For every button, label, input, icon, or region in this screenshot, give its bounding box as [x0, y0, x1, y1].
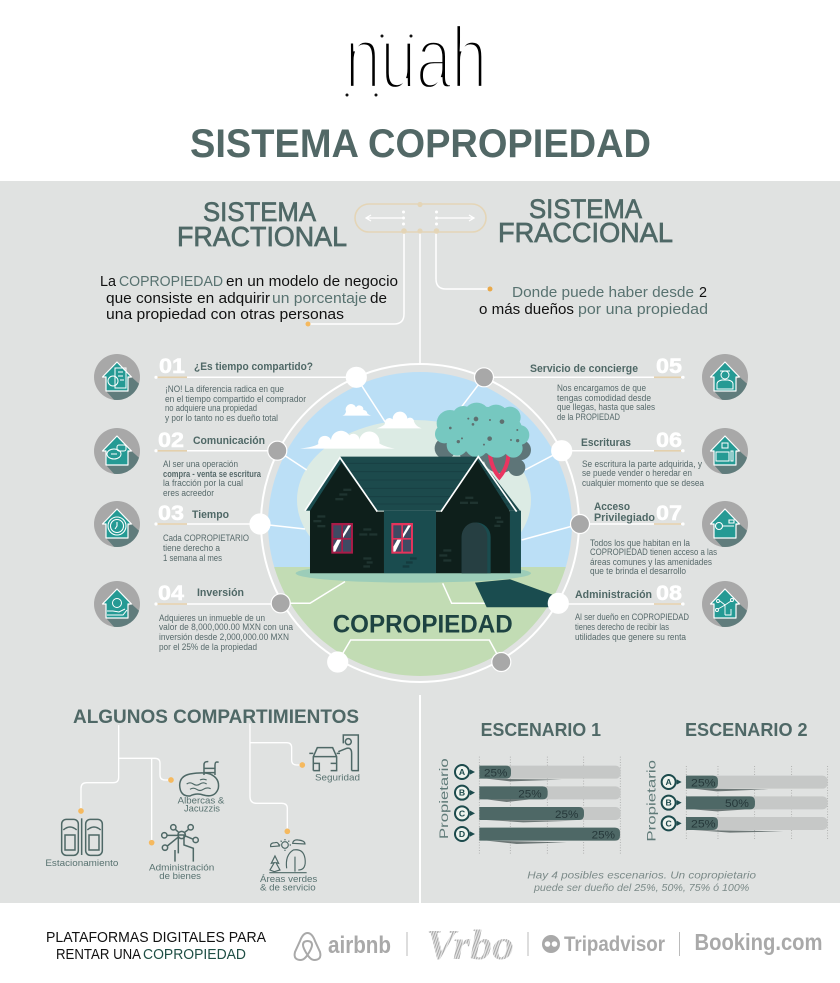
chart: scenario 2: A [666, 777, 673, 787]
item 02: compra - venta se escritura [163, 469, 262, 479]
footer: digital platforms heading: COPROPIEDAD [143, 947, 246, 963]
icon: 05 concierge house [702, 354, 755, 407]
note: possible scenarios: puede ser dueño del 25%, 50%, 75% ó 100% [533, 883, 749, 894]
text: definition of coproperty: en un modelo de negocio [226, 274, 398, 290]
chart: scenario 2: 25% [691, 819, 716, 831]
item 02: Comunicación [193, 435, 265, 447]
item 02: Al ser una operación [163, 459, 238, 469]
heading: escenario 1: ESCENARIO 1 [481, 719, 601, 740]
house illustration circle [260, 370, 580, 687]
text: definition of coproperty: de [370, 291, 387, 307]
item 03 [158, 502, 249, 563]
item 07: Acceso [594, 501, 630, 513]
text: definition of coproperty: un porcentaje [272, 291, 367, 307]
text: definition of coproperty: una propiedad con otras personas [106, 307, 344, 323]
tree [435, 403, 531, 477]
icon: 07 key and amenities house [702, 501, 755, 554]
icon: 03 clock house [94, 501, 147, 554]
note: possible scenarios: Hay 4 posibles escenarios. Un copropietario [527, 870, 756, 881]
item 06: se puede vender o heredar en [582, 468, 692, 478]
heading: sistema fraccional: FRACCIONAL [498, 217, 673, 248]
icon: security gate [309, 735, 358, 771]
item 06: Escrituras [581, 437, 631, 449]
item 06: 06 [656, 429, 682, 452]
panel: shared amenities: Administración [149, 863, 214, 873]
item 08: 08 [656, 582, 682, 605]
item 08: utilidades que genere su renta [575, 632, 686, 642]
item 05 [530, 355, 682, 422]
heading: sistema fractional: SISTEMA [203, 197, 316, 227]
icon: 08 network house [702, 581, 755, 634]
item 04: 04 [158, 582, 184, 605]
heading: sistema fractional: FRACTIONAL [177, 221, 347, 252]
icon: 01 calendar and clock house [94, 354, 147, 407]
text: definition of coproperty: que consiste en adquirir [106, 291, 270, 307]
item 04: inversión desde 2,000,000.00 MXN [159, 632, 289, 642]
icon: 04 money in hand house [94, 581, 147, 634]
item 07: COPROPIEDAD tienen acceso a las [590, 547, 717, 557]
panel: shared amenities: Seguridad [315, 773, 360, 783]
item 05: de la PROPIEDAD [557, 412, 620, 422]
item 01 [159, 355, 313, 423]
heading: algunos compartimientos: ALGUNOS COMPARTIMIENTOS [73, 707, 359, 728]
item 02: eres acreedor [163, 488, 214, 498]
icon: 06 deed and window house [702, 428, 755, 481]
item 07: Privilegiado [594, 512, 655, 524]
panel: shared amenities: de bienes [159, 871, 201, 881]
internal connectors [260, 377, 580, 662]
text: number of owners: por una propiedad [578, 302, 708, 318]
item 01: y por lo tanto no es dueño total [165, 413, 278, 423]
item 05: Nos encargamos de que [557, 383, 646, 393]
chart: scenario 1: 25% [592, 830, 615, 842]
item 03: 03 [158, 502, 184, 525]
item 01: ¿Es tiempo compartido? [194, 361, 313, 373]
footer: digital platforms heading [46, 930, 266, 963]
chart: scenario 1: B [459, 788, 465, 798]
chart: scenario 1 [437, 757, 621, 855]
icon: 02 chat bubbles house [94, 428, 147, 481]
logo: airbnb [295, 932, 391, 960]
logo: vrbo: Vrbo [426, 923, 514, 969]
text: definition of coproperty: COPROPIEDAD [119, 274, 223, 290]
text: definition of coproperty: La [100, 274, 117, 290]
icon: parking cars [62, 818, 102, 855]
item 05: que llegas, hasta que sales [557, 402, 655, 412]
item 05: tengas comodidad desde [557, 393, 651, 403]
item 03: 1 semana al mes [163, 553, 222, 563]
item 08: Al ser dueño en COPROPIEDAD [575, 612, 689, 622]
item 07: áreas comunes y las amenidades [590, 557, 712, 567]
ring with connector lines [154, 364, 685, 682]
bricks [313, 489, 503, 568]
chart: scenario 1: A [459, 767, 466, 777]
item 05: 05 [656, 355, 682, 378]
item 04: por el 25% de la propiedad [159, 642, 257, 652]
chart: scenario 2: C [666, 818, 673, 828]
chart: scenario 2: 25% [691, 777, 716, 789]
connector lines [81, 723, 300, 840]
label: coproperty: COPROPIEDAD [333, 611, 513, 639]
item 08: tienes derecho de recibir las [575, 622, 669, 632]
icon: network and hand [162, 825, 198, 862]
panel: shared amenities: Áreas verdes [260, 874, 318, 884]
icon: green areas [269, 839, 307, 873]
gray main background [0, 181, 840, 903]
item 08 [575, 582, 689, 642]
item 06: Se escritura la parte adquirida, y [582, 459, 702, 469]
windows [331, 523, 353, 554]
item 08: Administración [575, 589, 652, 601]
chart: scenario 1: 25% [555, 809, 578, 821]
heading: sistema fraccional [498, 194, 673, 248]
item 04: valor de 8,000,000.00 MXN con una [159, 622, 293, 632]
item 05: Servicio de concierge [530, 363, 638, 375]
labels: Estacionamiento [45, 858, 118, 868]
logo: tripadvisor: Tripadvisor [564, 932, 666, 956]
clouds [300, 404, 422, 449]
item 06 [581, 429, 704, 488]
item 03: Tiempo [192, 509, 229, 521]
item 04: Adquieres un inmueble de un [159, 613, 265, 623]
text: definition of coproperty [100, 274, 398, 323]
item 07 [590, 501, 717, 576]
logo: nuah: nuah [345, 8, 487, 107]
text: number of owners: Donde puede haber desde [512, 285, 694, 301]
panel: shared amenities: & de servicio [260, 883, 316, 893]
text: number of owners: 2 [699, 285, 707, 301]
text: number of owners [479, 285, 708, 318]
footer: digital platforms heading: RENTAR UNA [56, 947, 141, 963]
item 01: ¡NO! La diferencia radica en que [165, 384, 284, 394]
chart: scenario 1: D [459, 829, 465, 839]
item 03: tiene derecho a [163, 543, 220, 553]
item 02 [158, 429, 265, 498]
item 07: 07 [656, 502, 682, 525]
panel: shared amenities: Jacuzzis [184, 804, 220, 814]
logo: airbnb: airbnb [328, 932, 391, 959]
title: SISTEMA COPROPIEDAD [190, 122, 651, 166]
item 03: Cada COPROPIETARIO [163, 533, 249, 543]
chart: scenario 2: Propietario [645, 760, 659, 842]
panel: ownership scenarios [437, 719, 828, 894]
item 04 [158, 582, 293, 652]
heading: sistema fraccional: SISTEMA [529, 194, 642, 224]
item 04: Inversión [197, 587, 244, 599]
item 07: Todos los que habitan en la [590, 538, 690, 548]
chart: scenario 2: B [666, 798, 672, 808]
item 06: cualquier momento que se desea [582, 478, 704, 488]
item 02: la fracción por la cual [163, 478, 243, 488]
text: number of owners: o más dueños [479, 302, 574, 318]
logo: booking.com: Booking.com [694, 929, 822, 955]
note: possible scenarios [527, 870, 756, 894]
icon: pool [180, 762, 219, 796]
chart: scenario 1: C [459, 808, 466, 818]
heading: sistema fractional [177, 197, 347, 252]
house [296, 457, 553, 607]
chart: scenario 1: Propietario [437, 758, 451, 839]
pill diagram with connectors [306, 202, 492, 364]
heading: escenario 2: ESCENARIO 2 [685, 719, 808, 740]
footer: digital platforms heading: PLATAFORMAS DIGITALES PARA [46, 930, 266, 946]
chart: scenario 1: 25% [484, 768, 507, 780]
item 02: 02 [158, 429, 184, 452]
item 07: que te brinda el desarrollo [590, 566, 686, 576]
panel: shared amenities [45, 723, 360, 893]
item 01: no adquiere una propiedad [165, 403, 257, 413]
item 01: 01 [159, 355, 185, 378]
chart: scenario 1: 25% [518, 788, 542, 800]
chart: scenario 2: 50% [725, 798, 749, 810]
item 01: en el tiempo compartido el comprador [165, 394, 306, 404]
chart: scenario 2 [645, 760, 828, 842]
panel: shared amenities: Albercas & [178, 795, 225, 805]
